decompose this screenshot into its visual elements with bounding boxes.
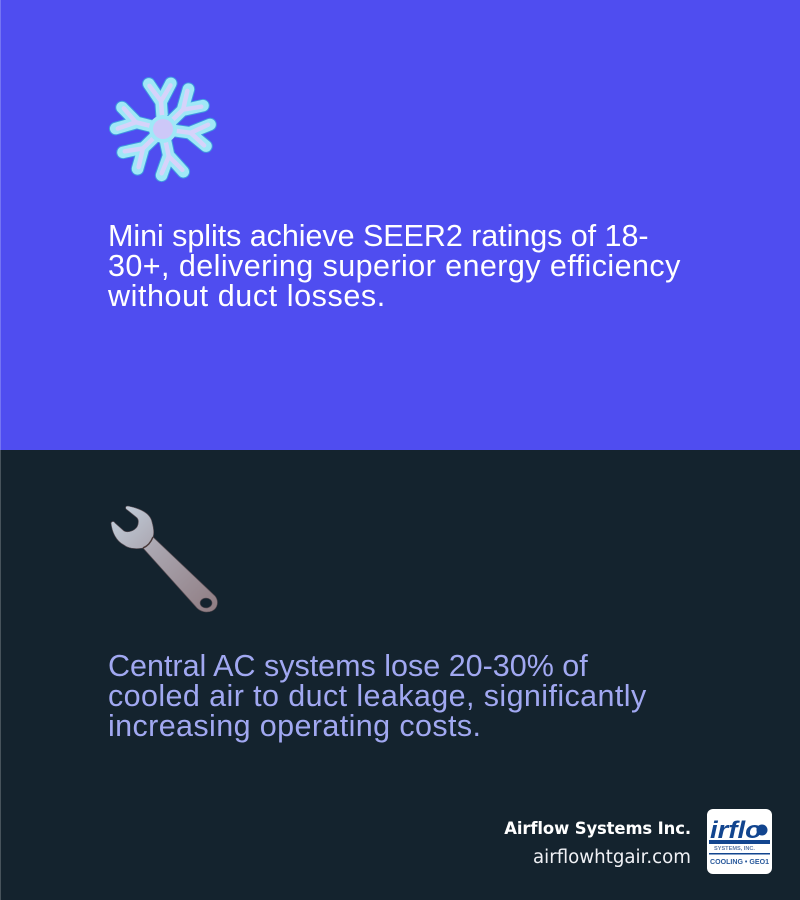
left edge highlight [0, 0, 1, 900]
logo: Airflow Systems: irflo [710, 817, 762, 844]
panel: mini split efficiency [0, 0, 800, 450]
text: mini split efficiency: without duct losses. [108, 279, 386, 313]
logo: Airflow Systems: COOLING • GEO1 [710, 857, 769, 866]
panel: central AC duct losses [0, 450, 800, 900]
icon: snowflake [109, 76, 217, 182]
footer: company name and website: Airflow Systems Inc. [504, 819, 691, 838]
footer: company name and website [504, 819, 691, 868]
text: mini split efficiency: Mini splits achieve SEER2 ratings of 18- [108, 219, 648, 253]
icon: wrench [110, 506, 218, 612]
text: central AC duct losses [108, 649, 647, 743]
logo: Airflow Systems [707, 809, 772, 874]
logo: Airflow Systems: SYSTEMS, INC. [714, 846, 756, 852]
footer: company name and website: airflowhtgair.com [533, 847, 691, 868]
text: central AC duct losses: increasing operating costs. [108, 709, 481, 743]
text: mini split efficiency: 30+, delivering superior energy efficiency [108, 249, 681, 283]
text: central AC duct losses: cooled air to duct leakage, significantly [108, 679, 647, 713]
text: central AC duct losses: Central AC systems lose 20-30% of [108, 649, 588, 683]
text: mini split efficiency [108, 219, 681, 313]
